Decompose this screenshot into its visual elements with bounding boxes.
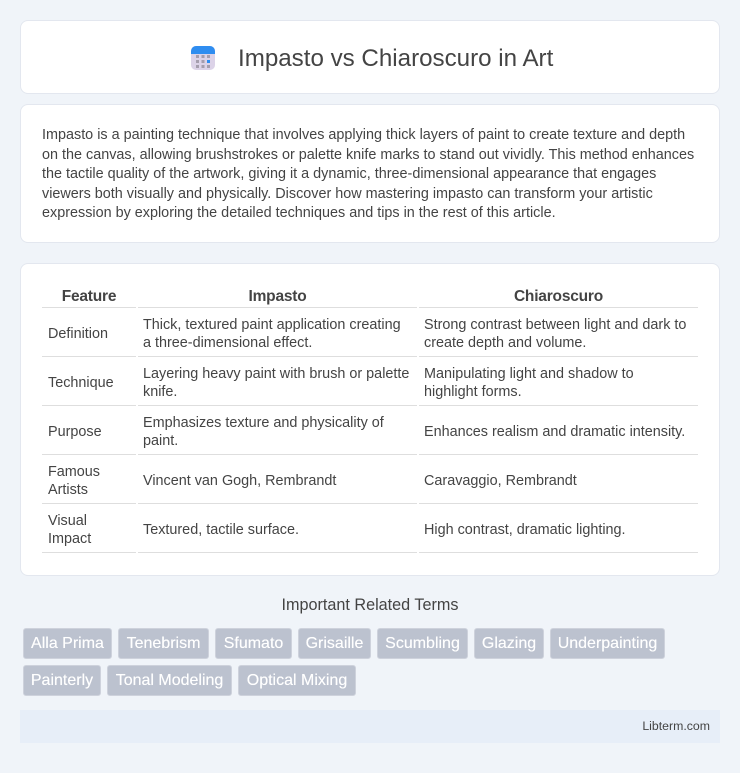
row: purpose: Enhances realism and dramatic intensity. (424, 424, 685, 440)
table header (62, 288, 603, 305)
tag (474, 628, 544, 659)
row: technique: Layering heavy paint with brush or palette (143, 366, 409, 382)
row: definition: Strong contrast between light and dark to (424, 317, 686, 333)
row: definition: Thick, textured paint application creating (143, 317, 401, 333)
intro text: viewers both visually and physically. Discover how mastering impasto can transform your artistic (42, 186, 653, 202)
table header: Feature (62, 288, 116, 305)
intro text: the tactile quality of the artwork, giving it a dynamic, three-dimensional appearance that engages (42, 166, 656, 182)
row: technique: highlight forms. (424, 384, 522, 400)
row: famous artists: Vincent van Gogh, Rembrandt (143, 473, 336, 489)
row: famous artists: Famous (48, 464, 100, 480)
row: purpose: Emphasizes texture and physicality of (143, 415, 384, 431)
related terms heading: Important Related Terms (282, 596, 458, 614)
row: famous artists: Caravaggio, Rembrandt (424, 473, 577, 489)
row: technique: Manipulating light and shadow to (424, 366, 634, 382)
row: visual impact: Visual (48, 513, 87, 529)
tag (550, 628, 665, 659)
footer credit: Libterm.com (642, 719, 710, 733)
row: technique (48, 366, 634, 400)
row: purpose: paint. (143, 433, 178, 449)
row: visual impact: Textured, tactile surface. (143, 522, 299, 538)
row: definition: Definition (48, 326, 108, 342)
comparison table panel (20, 263, 720, 576)
tag: Alla Prima (31, 635, 104, 652)
intro text: on the canvas, allowing brushstrokes or palette knife marks to stand out vividly. This method enhances (42, 147, 694, 163)
tag (23, 665, 101, 696)
row: famous artists (48, 464, 577, 498)
comparison table (42, 288, 698, 553)
title panel (20, 20, 720, 94)
tag (298, 628, 371, 659)
title: Impasto vs Chiaroscuro in Art (238, 45, 553, 72)
row: technique: knife. (143, 384, 177, 400)
intro text: Impasto is a painting technique that involves applying thick layers of paint to create texture and depth (42, 127, 685, 143)
row: visual impact: High contrast, dramatic lighting. (424, 522, 626, 538)
tag (118, 628, 209, 659)
tag: Tonal Modeling (116, 672, 223, 689)
row: technique: Technique (48, 375, 114, 391)
tag: Optical Mixing (247, 672, 347, 689)
intro text (42, 127, 694, 221)
related terms tags (23, 628, 665, 696)
tag: Underpainting (558, 635, 657, 652)
row: visual impact (48, 513, 626, 547)
row: definition (48, 317, 686, 351)
tag: Tenebrism (127, 635, 200, 652)
row: definition: a three-dimensional effect. (143, 335, 312, 351)
icon: calendar (191, 46, 215, 70)
tag: Glazing (482, 635, 536, 652)
tag (23, 628, 112, 659)
tag: Sfumato (224, 635, 283, 652)
row: definition: create depth and volume. (424, 335, 586, 351)
row: visual impact: Impact (48, 531, 91, 547)
tag: Painterly (31, 672, 93, 689)
tag: Grisaille (306, 635, 363, 652)
footer bar (20, 710, 720, 743)
tag: Scumbling (385, 635, 460, 652)
intro text: expression by exploring the detailed techniques and tips in the rest of this article. (42, 205, 556, 221)
tag (215, 628, 292, 659)
intro panel (20, 104, 720, 243)
row: famous artists: Artists (48, 482, 88, 498)
tag (107, 665, 232, 696)
tag (238, 665, 356, 696)
row: purpose: Purpose (48, 424, 102, 440)
row: purpose (48, 415, 685, 449)
tag (377, 628, 468, 659)
table header: Chiaroscuro (514, 288, 603, 305)
table header: Impasto (248, 288, 307, 305)
